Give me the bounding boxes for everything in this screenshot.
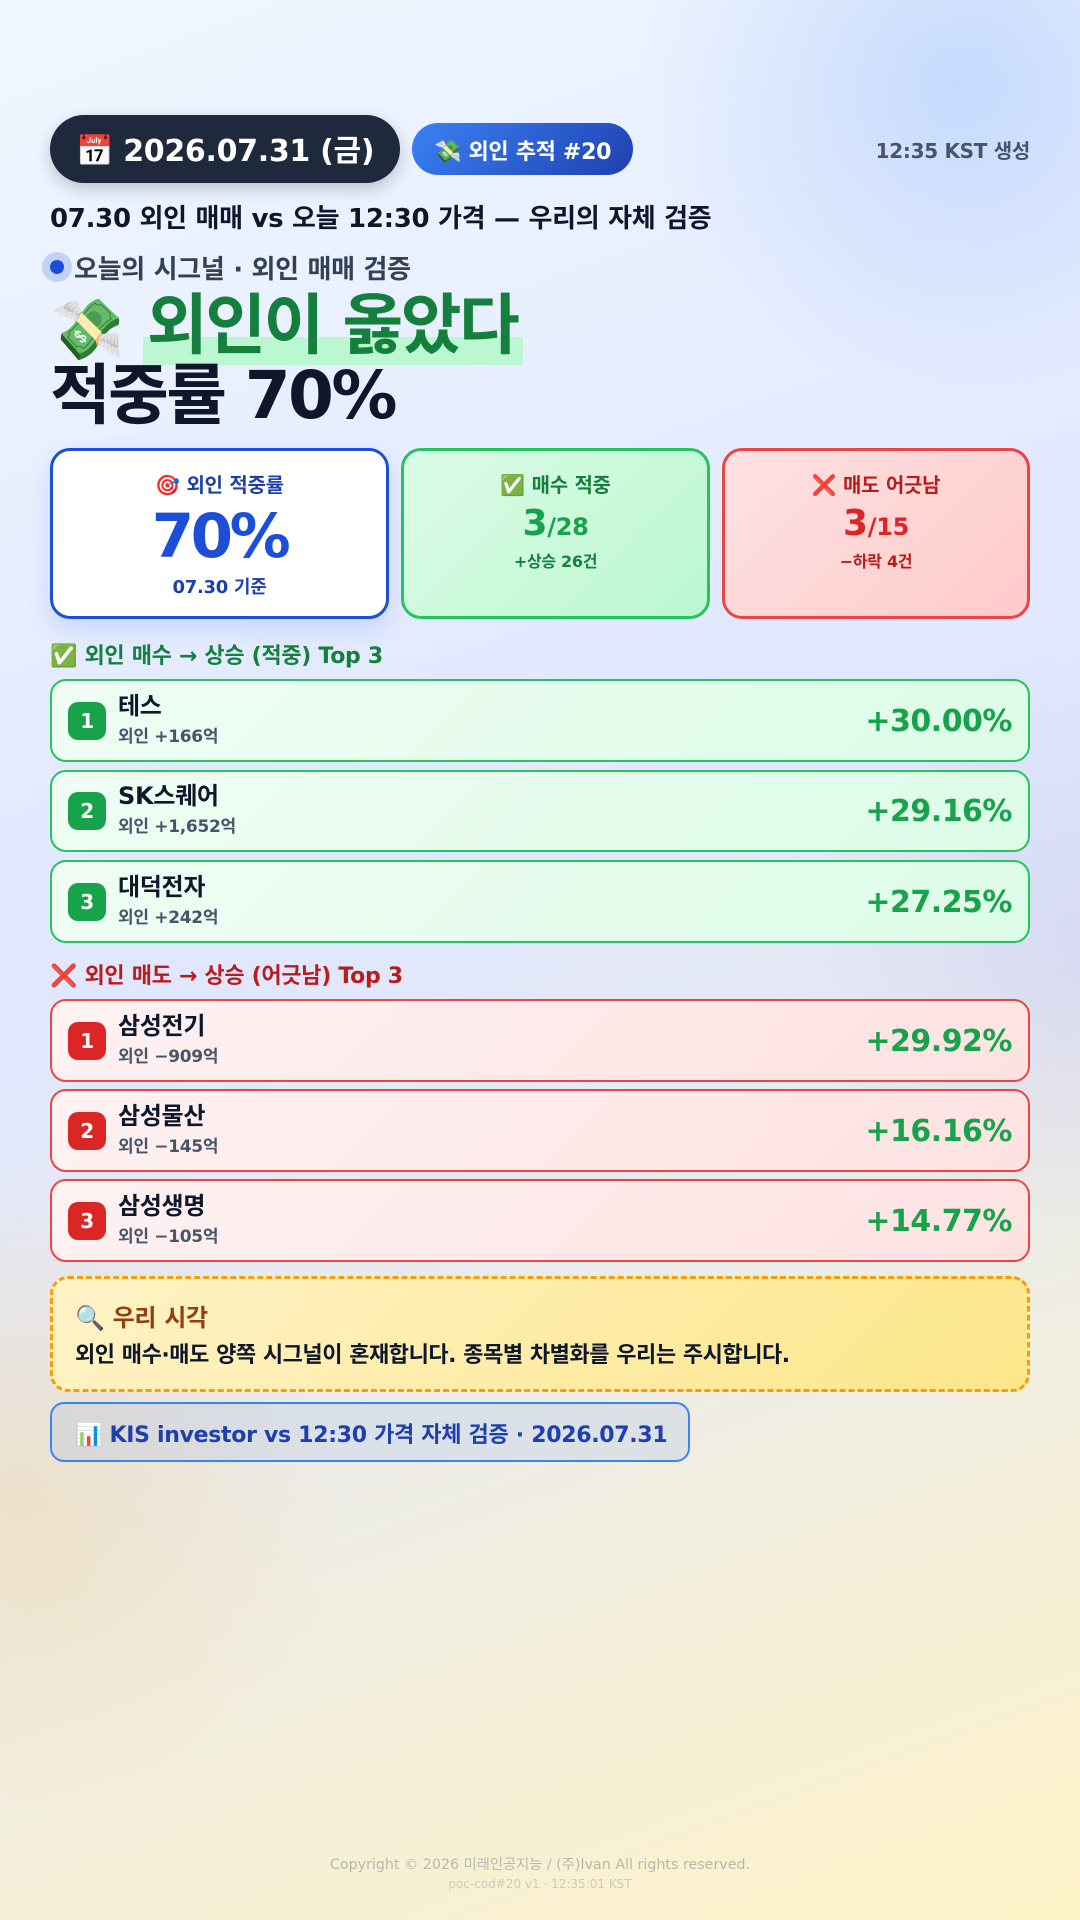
row: sell 2: +16.16% (865, 1114, 1012, 1149)
card: accuracy: 🎯 외인 적중률 (155, 473, 284, 497)
card: buy hits: 3/28 (522, 503, 588, 544)
source box: 📊 KIS investor vs 12:30 가격 자체 검증 · 2026.07.31 (75, 1423, 667, 1448)
card: buy hits: +상승 26건 (514, 552, 597, 571)
row: sell 1: 외인 −909억 (118, 1047, 218, 1067)
series badge: 💸 외인 추적 #20 (434, 140, 611, 165)
source box (50, 1402, 690, 1462)
series badge (412, 123, 633, 175)
row: sell 3: 외인 −105억 (118, 1227, 218, 1247)
card: sell misses: 3/15 (843, 503, 909, 544)
generated time: 12:35 KST 생성 (876, 139, 1030, 163)
row: sell 1: 삼성전기 (118, 1012, 205, 1040)
row: sell 1 (50, 999, 1030, 1082)
card: buy hits: ✅ 매수 적중 (500, 473, 611, 497)
headline: 외인이 옳았다 (147, 287, 518, 364)
footer: poc-cod#20 v1 · 12:35:01 KST (448, 1877, 632, 1891)
headline: 💸 (50, 295, 125, 365)
subtitle: 07.30 외인 매매 vs 오늘 12:30 가격 — 우리의 자체 검증 (50, 204, 711, 234)
date pill (50, 115, 400, 183)
card: accuracy: 70% (152, 501, 287, 572)
card: sell misses (722, 448, 1030, 619)
card: accuracy: 07.30 기준 (173, 577, 266, 598)
row: buy 3: 3 (80, 890, 94, 914)
footer: Copyright © 2026 미래인공지능 / (주)Ivan All rights reserved. (330, 1857, 750, 1873)
card: buy hits (401, 448, 710, 619)
headline (50, 287, 523, 434)
row: sell 3: +14.77% (865, 1204, 1012, 1239)
card: sell misses: −하락 4건 (840, 552, 912, 571)
row: buy 1: 테스 (118, 692, 162, 720)
section heading: buy: ✅ 외인 매수 → 상승 (적중) Top 3 (50, 644, 383, 669)
date pill: 📅 2026.07.31 (금) (76, 134, 374, 169)
insight callout: 🔍 우리 시각 (75, 1304, 208, 1332)
row: buy 2 (50, 770, 1030, 852)
row: sell 2: 2 (80, 1119, 94, 1143)
section heading: sell: ❌ 외인 매도 → 상승 (어긋남) Top 3 (50, 964, 403, 989)
row: sell 2: 삼성물산 (118, 1102, 205, 1130)
row: buy 2: SK스퀘어 (118, 782, 219, 810)
row: buy 1: 1 (80, 709, 94, 733)
eyebrow with dot: 오늘의 시그널 · 외인 매매 검증 (74, 255, 411, 285)
row: buy 1: 외인 +166억 (118, 727, 218, 747)
row: sell 1: 1 (80, 1029, 94, 1053)
row: sell 3: 삼성생명 (118, 1192, 205, 1220)
row: buy 3: 외인 +242억 (118, 908, 218, 928)
insight callout (50, 1276, 1030, 1392)
row: buy 3: 대덕전자 (118, 873, 205, 901)
headline: 적중률 70% (50, 357, 395, 434)
footer (330, 1857, 750, 1891)
row: buy 3 (50, 860, 1030, 943)
card: accuracy (50, 448, 389, 619)
row: buy 1: +30.00% (865, 704, 1012, 739)
row: buy 2: +29.16% (865, 794, 1012, 829)
card: sell misses: ❌ 매도 어긋남 (812, 473, 940, 497)
row: buy 2: 외인 +1,652억 (118, 817, 236, 837)
row: sell 1: +29.92% (865, 1024, 1012, 1059)
row: sell 2 (50, 1089, 1030, 1172)
row: sell 3: 3 (80, 1209, 94, 1233)
row: sell 2: 외인 −145억 (118, 1137, 218, 1157)
row: buy 3: +27.25% (865, 885, 1012, 920)
row: buy 2: 2 (80, 799, 94, 823)
insight callout: 외인 매수·매도 양쪽 시그널이 혼재합니다. 종목별 차별화를 우리는 주시합니다. (75, 1343, 790, 1368)
row: buy 1 (50, 679, 1030, 762)
row: sell 3 (50, 1179, 1030, 1262)
